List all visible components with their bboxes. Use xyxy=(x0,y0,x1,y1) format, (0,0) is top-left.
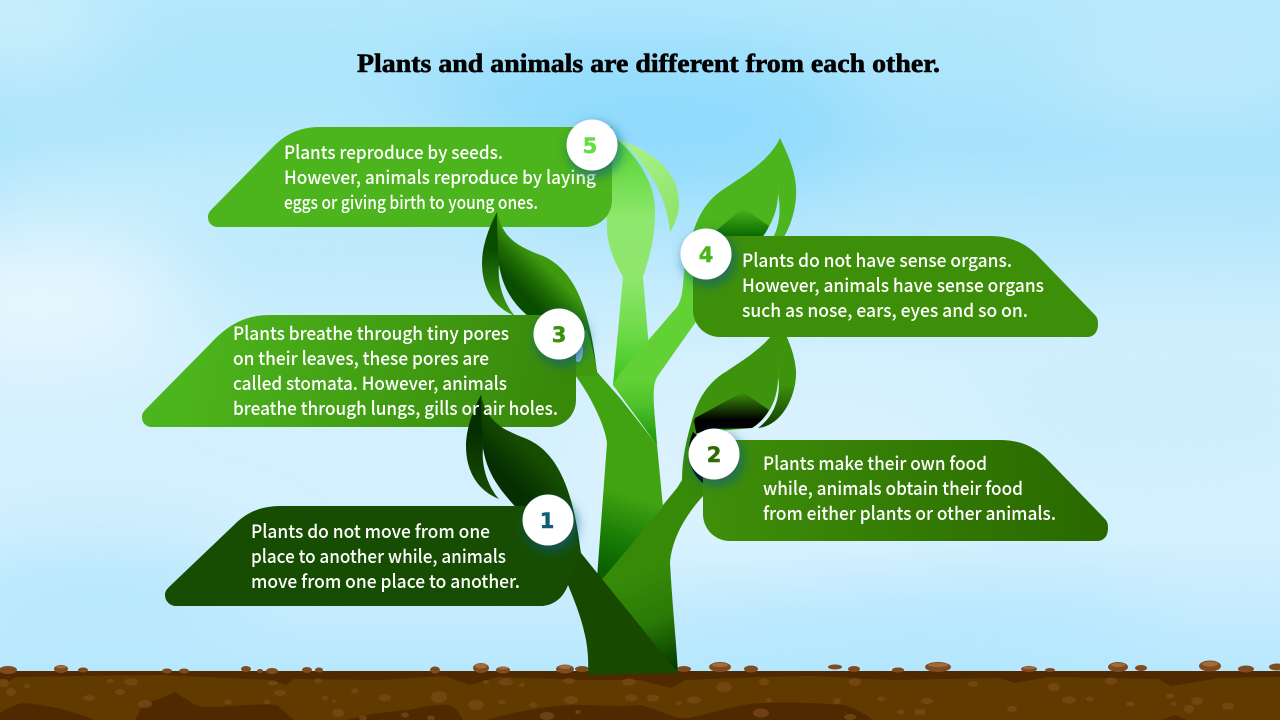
callout 5 text: However, animals reproduce by laying xyxy=(284,164,596,190)
number badge 3: 3 xyxy=(552,323,566,347)
callout 5 text xyxy=(284,139,596,215)
number badge 1: 1 xyxy=(540,509,554,533)
stem branch 4 xyxy=(613,240,700,445)
number badge 2: 2 xyxy=(707,443,721,467)
callout 5 text: eggs or giving birth to young ones. xyxy=(284,189,538,215)
stem branch 2 and trunk xyxy=(600,417,704,673)
callout 1 text xyxy=(251,518,520,594)
title: Plants and animals are different from each other. xyxy=(357,49,940,78)
top spoon leaf xyxy=(600,139,657,445)
number badge 3 xyxy=(534,308,584,360)
leaf 4 xyxy=(690,138,796,245)
callout 4 text: However, animals have sense organs xyxy=(742,272,1044,298)
callout 1 text: Plants do not move from one xyxy=(251,518,490,544)
number badge 4: 4 xyxy=(699,243,713,267)
callout 1 right edge xyxy=(540,506,580,606)
callout 4 text xyxy=(742,247,1044,323)
number badge 5 xyxy=(566,120,618,170)
callout 1 text: place to another while, animals xyxy=(251,543,506,569)
callout 2 text: while, animals obtain their food xyxy=(763,475,1023,501)
number badge 5: 5 xyxy=(583,134,597,158)
middle stem xyxy=(575,372,663,582)
number badge 1 xyxy=(522,494,574,546)
callout 4 text: Plants do not have sense organs. xyxy=(742,247,1012,273)
leaf 1 and trunk left xyxy=(466,395,678,675)
top small light leaf xyxy=(617,139,679,233)
leaf 3 lower bright part xyxy=(555,330,600,376)
callout 3 text: Plants breathe through tiny pores xyxy=(233,320,509,346)
callout 2 text: Plants make their own food xyxy=(763,450,987,476)
callout 5 box xyxy=(208,127,612,227)
callout 3 text: breathe through lungs, gills or air holes. xyxy=(233,395,558,421)
sky gap beside callout 3 xyxy=(573,340,583,362)
leaf 2 xyxy=(690,322,796,436)
number badge 4 xyxy=(680,228,732,280)
number badge 2 xyxy=(688,428,740,480)
callout 2 box xyxy=(703,440,1108,541)
callout 4 text: such as nose, ears, eyes and so on. xyxy=(742,297,1028,323)
callout 3 text xyxy=(233,320,558,421)
plant: upper stem and leaves xyxy=(575,138,796,673)
black leaf shadow crescent xyxy=(689,432,708,484)
callout 1 text: move from one place to another. xyxy=(251,568,520,594)
callout 3 box xyxy=(142,315,576,427)
callout 2 text: from either plants or other animals. xyxy=(763,500,1056,526)
leaf 3 xyxy=(482,212,600,376)
callout 4 box xyxy=(693,236,1098,337)
ground: soil xyxy=(0,671,1280,720)
rocks on the ground xyxy=(0,660,1280,674)
callout 5 text: Plants reproduce by seeds. xyxy=(284,139,503,165)
callout 3 text: called stomata. However, animals xyxy=(233,370,507,396)
callout 3 text: on their leaves, these pores are xyxy=(233,345,489,371)
callout 2 text xyxy=(763,450,1056,526)
callout 1 box xyxy=(165,506,560,606)
